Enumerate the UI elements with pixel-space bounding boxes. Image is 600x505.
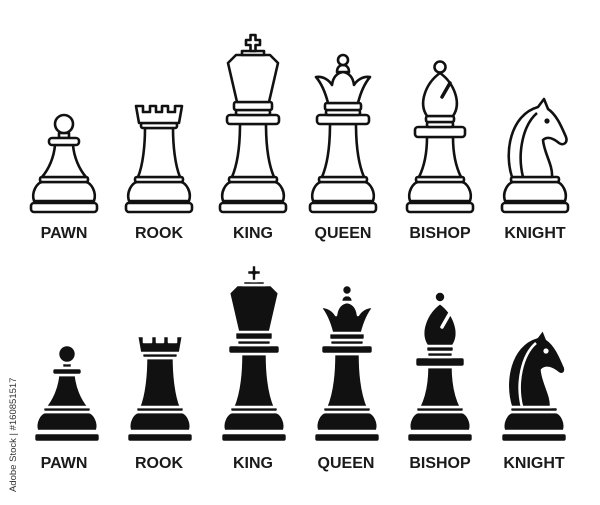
piece: black bishop bbox=[407, 292, 473, 442]
labels: bottom row bbox=[41, 455, 565, 472]
piece: white bishop bbox=[407, 62, 473, 212]
labels: top row: KING bbox=[233, 225, 273, 242]
piece: black rook bbox=[127, 336, 193, 442]
piece: black king bbox=[221, 265, 287, 442]
labels: top row bbox=[41, 225, 566, 242]
labels: top row: KNIGHT bbox=[504, 225, 566, 242]
labels: bottom row: BISHOP bbox=[409, 455, 471, 472]
watermark text: Adobe Stock | #160851517 bbox=[8, 378, 19, 492]
labels: top row: BISHOP bbox=[409, 225, 471, 242]
piece: white queen bbox=[310, 55, 376, 212]
piece: black knight bbox=[501, 329, 567, 442]
piece: white rook bbox=[126, 106, 192, 212]
row: black pieces bbox=[34, 265, 567, 442]
labels: bottom row: QUEEN bbox=[318, 455, 374, 472]
labels: top row: PAWN bbox=[41, 225, 87, 242]
labels: top row: QUEEN bbox=[315, 225, 371, 242]
labels: bottom row: PAWN bbox=[41, 455, 87, 472]
labels: bottom row: KNIGHT bbox=[503, 455, 565, 472]
piece: white knight bbox=[502, 99, 568, 212]
labels: bottom row: ROOK bbox=[135, 455, 183, 472]
piece: black pawn bbox=[34, 345, 100, 442]
piece: black queen bbox=[314, 285, 380, 442]
piece: white king bbox=[220, 35, 286, 212]
labels: top row: ROOK bbox=[135, 225, 183, 242]
labels: bottom row: KING bbox=[233, 455, 273, 472]
row: white pieces bbox=[31, 35, 568, 212]
piece: white pawn bbox=[31, 115, 97, 212]
